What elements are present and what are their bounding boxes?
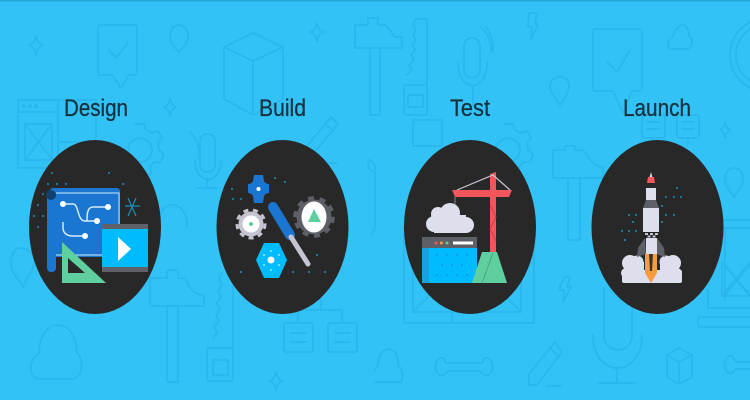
icon: compass star — [125, 198, 140, 216]
heading: Test: Test — [450, 95, 490, 122]
panel: build circle — [216, 140, 348, 314]
icon: crane — [452, 172, 512, 252]
icon: set square — [62, 242, 106, 283]
icon: screwdriver — [273, 207, 308, 264]
dots — [621, 187, 682, 241]
icon: crane base — [472, 252, 507, 283]
dots — [33, 172, 124, 228]
icon: small gear — [237, 210, 265, 238]
middle row — [153, 205, 187, 245]
dots — [231, 177, 326, 273]
icon: hexagon — [256, 243, 287, 278]
heading: Build: Build — [259, 95, 306, 122]
icon: video player — [102, 224, 148, 272]
browser window left — [18, 100, 96, 168]
icon: browser window — [422, 237, 477, 283]
bottom row — [11, 248, 34, 287]
gears — [132, 124, 164, 177]
icon: rocket — [637, 172, 665, 283]
icon: blueprint — [46, 188, 120, 272]
icon: large gear — [295, 198, 333, 236]
heading: Launch: Launch — [623, 95, 691, 122]
icon: plus shape — [248, 175, 269, 203]
heading: Design: Design — [64, 95, 128, 122]
panel: test circle — [404, 140, 536, 314]
icon: smoke clouds — [621, 255, 682, 283]
panel: launch circle — [592, 140, 724, 314]
icon: cloud — [426, 203, 474, 233]
top row — [29, 36, 43, 55]
panel: design circle — [29, 140, 161, 314]
